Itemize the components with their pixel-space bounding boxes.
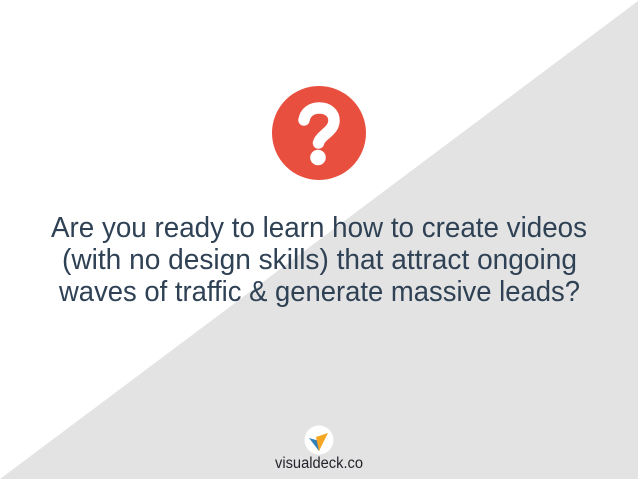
visualdeck logo [275, 426, 363, 472]
headline text [51, 212, 587, 308]
headline text: (with no design skills) that attract ongoing [62, 244, 577, 276]
headline text: Are you ready to learn how to create videos [51, 212, 587, 244]
icon: red question mark [272, 86, 366, 180]
headline text: waves of traffic & generate massive leads? [58, 276, 580, 308]
logo badge [304, 426, 334, 454]
logo wordmark: visualdeck.co [275, 455, 363, 472]
